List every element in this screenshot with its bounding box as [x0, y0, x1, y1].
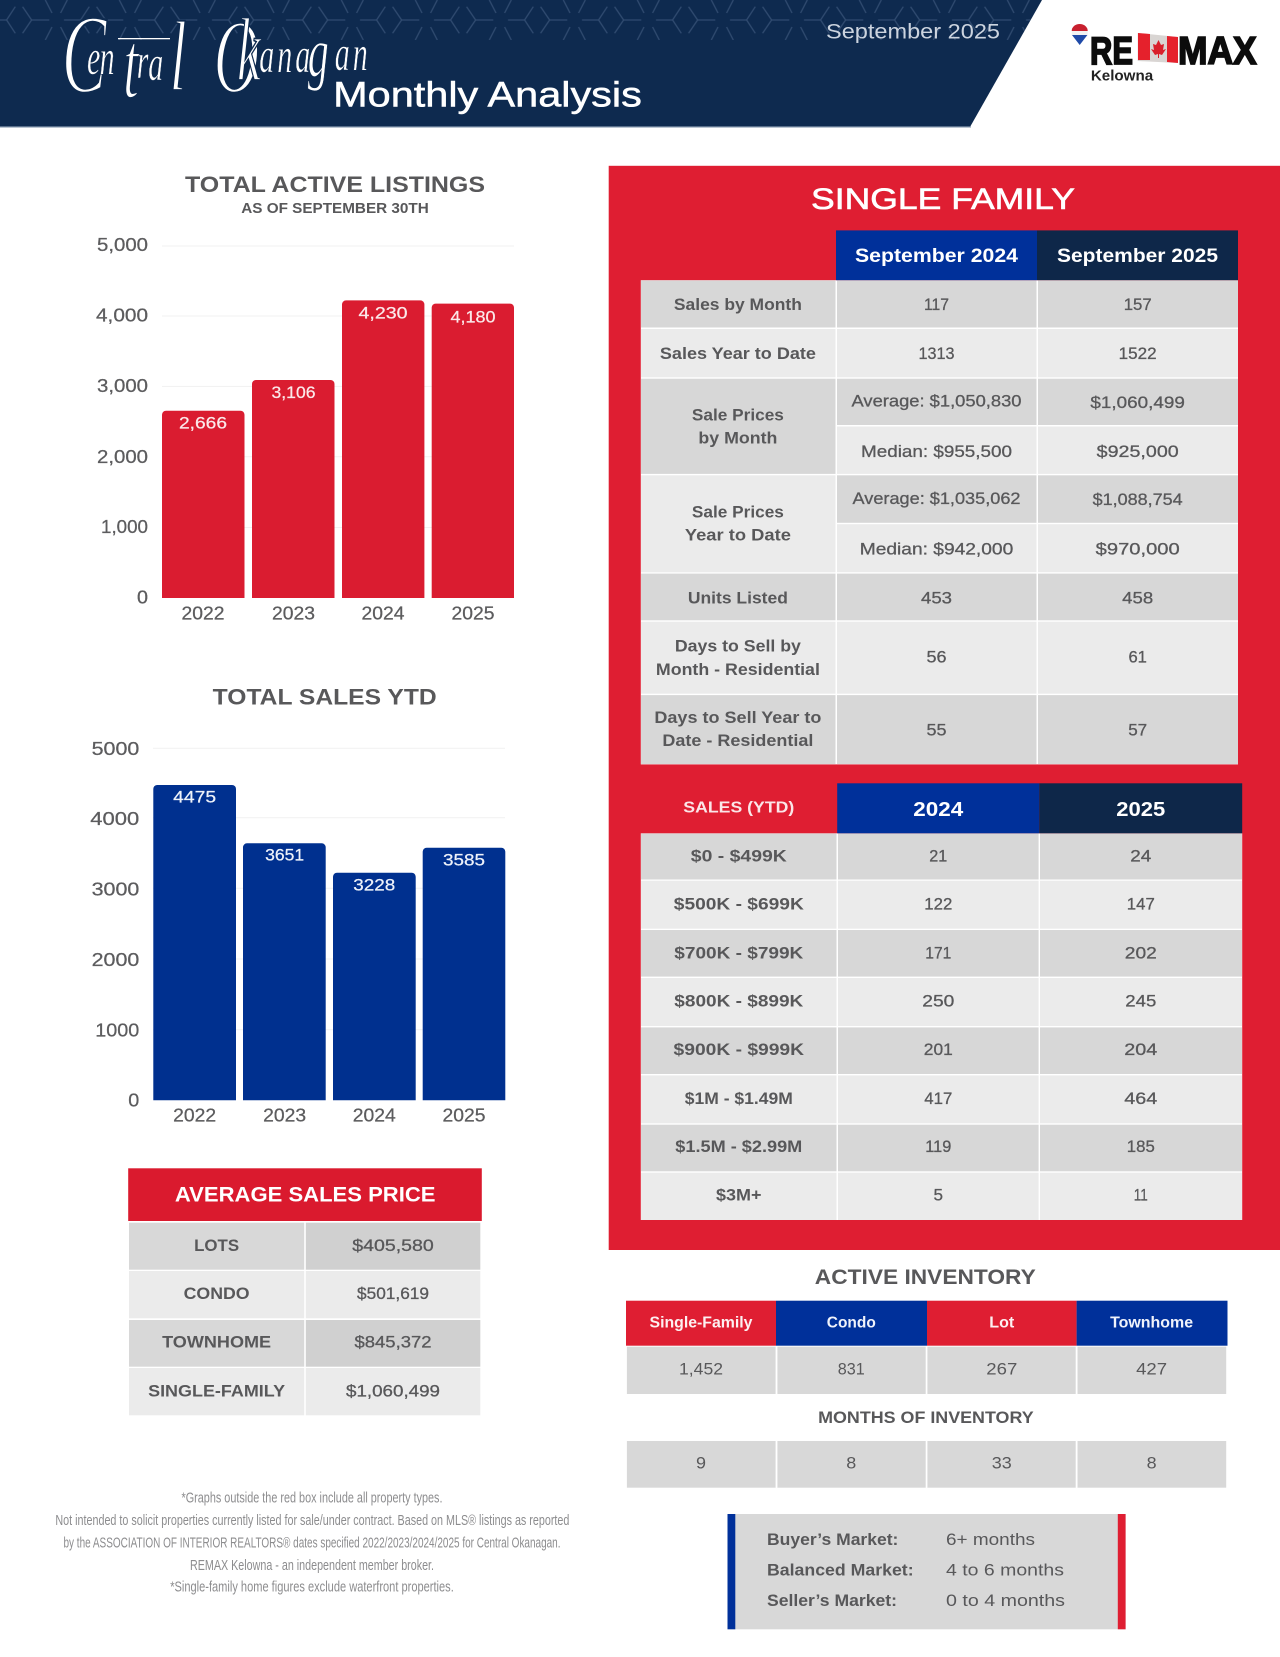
icon: balloon	[1072, 24, 1088, 45]
table: months of inventory: 8	[846, 1454, 856, 1473]
footnote: REMAX Kelowna - an independent member broker.	[190, 1557, 434, 1574]
row: sales year to date: 1313	[918, 344, 954, 363]
script title: r	[137, 33, 149, 89]
bar 2022: 2022	[173, 1106, 216, 1126]
callout: market definitions	[728, 1514, 1126, 1629]
date: September 2025	[826, 21, 1000, 44]
row: townhome: $845,372	[354, 1333, 432, 1352]
bar chart: total active listings: 1,000	[101, 517, 148, 537]
row: $900K - $999K	[674, 1040, 1157, 1059]
column: single-family	[626, 1301, 776, 1394]
footnote: *Single-family home figures exclude waterfront properties.	[170, 1579, 454, 1596]
row: sale prices by month: $1,060,499	[1090, 393, 1185, 412]
script title: l	[170, 1, 186, 112]
row: single-family: SINGLE-FAMILY	[148, 1383, 285, 1401]
callout: market definitions: 6+ months	[946, 1530, 1035, 1549]
row: sale prices by month: Median: $955,500	[861, 442, 1012, 461]
row: $3M+: $3M+	[716, 1186, 762, 1205]
row: sales by month: 117	[924, 295, 949, 314]
bar 2023: 3651	[265, 846, 304, 865]
row: $3M+: 11	[1134, 1186, 1148, 1205]
chart title: total active listings: TOTAL ACTIVE LISTINGS	[185, 172, 485, 197]
column: condo: 831	[838, 1359, 865, 1378]
table: months of inventory: 33	[992, 1454, 1012, 1473]
row: single-family: $1,060,499	[346, 1382, 440, 1401]
row: condo	[184, 1284, 429, 1303]
script title: a	[295, 27, 310, 83]
row: $900K - $999K: $900K - $999K	[674, 1040, 805, 1059]
script title: a	[259, 27, 274, 83]
bar chart: total active listings: 5,000	[97, 235, 148, 255]
icon: canadian flag	[1138, 33, 1178, 63]
script title: O	[198, 0, 259, 115]
table: sales ytd by price range	[641, 783, 1242, 1220]
row: sale prices by month: Sale Prices	[692, 405, 784, 424]
script title: t	[123, 12, 140, 118]
row: $3M+: 5	[934, 1186, 943, 1205]
bar chart: total sales ytd: 3000	[92, 880, 139, 900]
column header: 2024	[837, 783, 1039, 833]
bar 2024: 2024	[353, 1106, 396, 1126]
bar 2024	[333, 873, 416, 1126]
script title: n	[100, 29, 115, 85]
row: sale prices year to date: Sale Prices	[692, 502, 784, 521]
row: days to sell by month: Days to Sell by	[675, 637, 801, 656]
row: sale prices year to date: Median: $942,000	[860, 540, 1013, 559]
row: sales year to date: 1522	[1119, 344, 1157, 363]
column header: 2025: 2025	[1116, 799, 1165, 821]
row: condo: CONDO	[184, 1285, 250, 1303]
callout: market definitions: Balanced Market:	[767, 1561, 914, 1580]
bar 2024: 2024	[362, 604, 404, 624]
label: sales ytd: SALES (YTD)	[683, 800, 794, 817]
row: days to sell by month: Month - Residential	[656, 660, 820, 679]
bar 2025	[423, 848, 505, 1126]
column header: september 2025	[1037, 230, 1238, 280]
row: $0 - $499K: 21	[929, 846, 947, 865]
footnote: by the ASSOCIATION OF INTERIOR REALTORS® dates specified 2022/2023/2024/2025 for Central Okanagan.	[64, 1534, 560, 1551]
row: $1M - $1.49M: 417	[924, 1089, 952, 1108]
row: $500K - $699K: 122	[924, 894, 952, 913]
row: sales by month	[674, 295, 1152, 314]
column header: september 2024	[836, 230, 1037, 280]
row: lots	[194, 1236, 434, 1255]
row: days to sell by month	[656, 637, 1147, 679]
script title: g	[308, 15, 329, 92]
panel: single family	[609, 166, 1280, 1250]
row: $1M - $1.49M: $1M - $1.49M	[685, 1089, 793, 1108]
row: $3M+	[716, 1186, 1148, 1205]
callout: market definitions: 4 to 6 months	[946, 1561, 1064, 1580]
bar chart: total sales ytd: 4000	[90, 809, 139, 829]
bar chart: total sales ytd: 5000	[92, 739, 139, 759]
row: sales by month: 157	[1124, 295, 1152, 314]
row: sale prices year to date	[685, 489, 1183, 559]
logo: RE/MAX Kelowna: MAX	[1178, 30, 1257, 73]
row: sale prices by month: $925,000	[1097, 442, 1179, 461]
bar 2022: 2022	[182, 604, 224, 624]
table: months of inventory: 9	[696, 1454, 706, 1473]
row: sale prices by month: by Month	[698, 428, 777, 448]
row: $1.5M - $2.99M: 119	[925, 1137, 951, 1156]
column: lot: Lot	[989, 1314, 1014, 1331]
bar chart: total active listings	[96, 235, 514, 624]
row: lots: $405,580	[352, 1236, 434, 1255]
row: sale prices year to date: Year to Date	[685, 526, 791, 544]
logo: RE/MAX Kelowna	[1072, 24, 1257, 85]
row: days to sell year to date: 55	[926, 720, 946, 739]
table: monthly comparison	[641, 230, 1238, 764]
row: $500K - $699K	[674, 894, 1155, 913]
row: condo: $501,619	[357, 1284, 429, 1303]
column header: september 2024: September 2024	[855, 246, 1018, 267]
row: single-family	[148, 1382, 440, 1401]
panel title: SINGLE FAMILY	[811, 183, 1075, 216]
row: $0 - $499K: $0 - $499K	[691, 846, 788, 865]
row: $700K - $799K	[674, 943, 1157, 962]
column header: september 2025: September 2025	[1057, 246, 1218, 267]
bar chart: total active listings: 4,000	[96, 305, 148, 325]
logo: RE/MAX Kelowna: Kelowna	[1091, 68, 1154, 85]
row: $0 - $499K: 24	[1130, 846, 1151, 865]
bar chart: total sales ytd: 2000	[92, 950, 139, 970]
subtitle: monthly analysis: Monthly Analysis	[333, 76, 642, 115]
chart title: total sales ytd: TOTAL SALES YTD	[213, 684, 437, 709]
bar chart: total active listings: 3,000	[97, 376, 148, 396]
row: $800K - $899K: 250	[922, 991, 954, 1010]
row: units listed: Units Listed	[688, 589, 788, 608]
row: townhome: TOWNHOME	[162, 1334, 271, 1352]
bar 2023	[252, 380, 334, 624]
column: townhome	[1077, 1301, 1228, 1394]
bar chart: total sales ytd	[90, 739, 505, 1126]
row: $700K - $799K: 202	[1125, 943, 1157, 962]
column: townhome: 427	[1136, 1359, 1167, 1378]
bar 2023: 3,106	[272, 383, 316, 402]
bar 2024	[342, 300, 424, 624]
row: days to sell by month: 56	[926, 647, 946, 666]
row: units listed	[688, 589, 1153, 608]
bar 2023	[243, 843, 326, 1126]
chart title: total active listings	[185, 172, 485, 217]
column: lot: 267	[986, 1359, 1017, 1378]
row: $900K - $999K: 201	[924, 1040, 953, 1059]
row: days to sell year to date	[654, 708, 1147, 750]
row: units listed: 458	[1122, 589, 1153, 608]
callout: market definitions: 0 to 4 months	[946, 1591, 1065, 1610]
bar 2025: 3585	[443, 851, 485, 870]
row: sales year to date: Sales Year to Date	[660, 344, 816, 363]
row: sale prices year to date: Average: $1,035,062	[852, 489, 1020, 508]
column header: 2025	[1039, 783, 1242, 833]
row: $700K - $799K: 171	[925, 943, 951, 962]
table header	[128, 1168, 482, 1221]
bar 2024: 4,230	[358, 304, 408, 323]
bar 2025	[432, 304, 514, 624]
bar 2024: 3228	[353, 876, 395, 895]
row: sale prices by month: Average: $1,050,830	[852, 392, 1022, 411]
script title: k	[237, 1, 262, 101]
row: $800K - $899K: 245	[1125, 991, 1156, 1010]
footnote	[55, 1490, 569, 1596]
row: sales by month: Sales by Month	[674, 295, 802, 314]
chart title: total active listings: AS OF SEPTEMBER 30TH	[241, 201, 429, 217]
table header: AVERAGE SALES PRICE	[175, 1183, 436, 1206]
row: $500K - $699K: 147	[1127, 894, 1155, 913]
row: sale prices by month	[692, 392, 1185, 461]
callout: market definitions: Buyer’s Market:	[767, 1530, 898, 1549]
callout: market definitions: Seller’s Market:	[767, 1591, 897, 1610]
column: single-family: 1,452	[679, 1359, 723, 1378]
heading: months of inventory: MONTHS OF INVENTORY	[818, 1409, 1034, 1427]
script title: a	[148, 35, 163, 91]
bar 2023: 2023	[263, 1106, 306, 1126]
column: single-family: Single-Family	[650, 1314, 753, 1331]
row: days to sell by month: 61	[1128, 647, 1147, 666]
bar chart: total sales ytd: 0	[128, 1091, 139, 1111]
row: $1.5M - $2.99M: $1.5M - $2.99M	[675, 1137, 802, 1156]
row: $1M - $1.49M	[685, 1089, 1157, 1108]
table: active inventory	[626, 1301, 1228, 1394]
row: sales year to date	[660, 344, 1157, 363]
row: townhome	[162, 1333, 432, 1352]
column: condo	[776, 1301, 927, 1394]
row: $1M - $1.49M: 464	[1124, 1089, 1157, 1108]
row: days to sell year to date: Days to Sell Year to	[654, 708, 821, 727]
row: days to sell year to date: 57	[1128, 720, 1147, 739]
column: lot	[927, 1301, 1077, 1394]
bar 2022: 2,666	[179, 414, 227, 433]
bar 2025: 2025	[452, 604, 494, 624]
row: sale prices year to date: $1,088,754	[1093, 490, 1183, 509]
bar 2022: 4475	[173, 788, 216, 807]
row: $800K - $899K: $800K - $899K	[674, 991, 804, 1010]
row: units listed: 453	[921, 589, 952, 608]
row: lots: LOTS	[194, 1237, 239, 1255]
footnote: Not intended to solicit properties currently listed for sale/under contract. Based on MLS® listings as reported	[55, 1512, 569, 1529]
bar chart: total sales ytd: 1000	[95, 1021, 139, 1041]
header banner	[0, 0, 1042, 128]
row: $500K - $699K: $500K - $699K	[674, 894, 805, 913]
row: $0 - $499K	[691, 846, 1151, 865]
table: average sales price	[128, 1168, 482, 1415]
script title: n	[353, 25, 368, 81]
bar 2022	[162, 411, 244, 624]
column: condo: Condo	[827, 1314, 876, 1331]
bar 2025: 4,180	[450, 308, 496, 326]
table: months of inventory	[627, 1441, 1226, 1488]
footnote: *Graphs outside the red box include all property types.	[182, 1490, 442, 1507]
row: $900K - $999K: 204	[1124, 1040, 1157, 1059]
row: $1.5M - $2.99M	[675, 1137, 1155, 1156]
script title: e	[87, 29, 100, 85]
row: $700K - $799K: $700K - $799K	[674, 943, 804, 962]
row: $800K - $899K	[674, 991, 1156, 1010]
bar 2023: 2023	[272, 604, 315, 624]
bar chart: total active listings: 0	[137, 588, 148, 608]
table: months of inventory: 8	[1147, 1454, 1157, 1473]
column: townhome: Townhome	[1110, 1314, 1193, 1331]
bar 2025: 2025	[442, 1106, 486, 1126]
script title: a	[335, 25, 350, 81]
column header: 2024: 2024	[913, 799, 964, 821]
heading: active inventory: ACTIVE INVENTORY	[815, 1266, 1036, 1289]
row: $1.5M - $2.99M: 185	[1127, 1137, 1155, 1156]
bar chart: total active listings: 2,000	[97, 447, 148, 467]
script title: n	[277, 27, 292, 83]
bar 2022	[153, 785, 236, 1126]
row: days to sell year to date: Date - Residential	[662, 731, 813, 750]
logo: RE/MAX Kelowna: RE	[1090, 30, 1133, 73]
row: sale prices year to date: $970,000	[1096, 540, 1180, 559]
